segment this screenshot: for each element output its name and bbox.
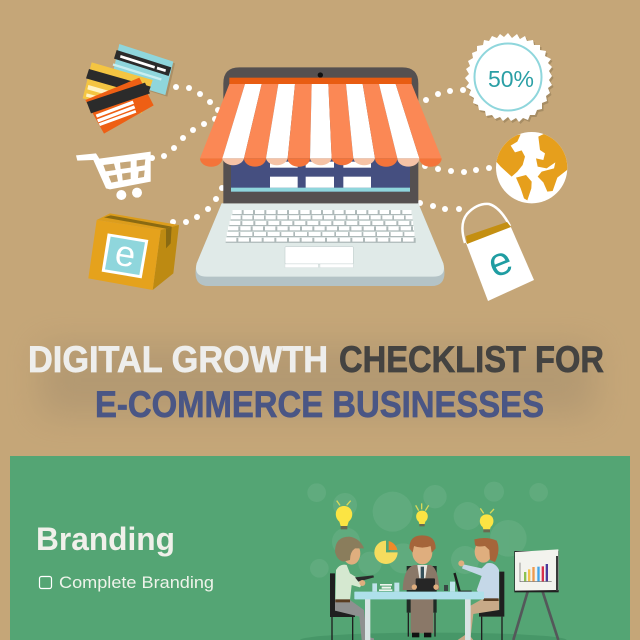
icon: globe xyxy=(493,132,570,203)
checklist item: Complete Branding xyxy=(59,573,214,592)
keyboard xyxy=(226,212,416,240)
title: E-COMMERCE BUSINESSES xyxy=(95,384,544,425)
icon: parcel box: e xyxy=(112,232,139,275)
title: CHECKLIST FOR xyxy=(339,339,604,380)
title: DIGITAL GROWTH xyxy=(28,339,328,380)
touchpad xyxy=(285,247,353,264)
title glow xyxy=(40,345,595,415)
bag letter: e xyxy=(481,237,519,287)
person left xyxy=(330,537,374,640)
icon: shopping bag xyxy=(462,204,534,301)
pie chart icon xyxy=(374,541,398,564)
screen bezel xyxy=(223,67,418,203)
awning xyxy=(200,78,442,167)
dotted connector lines xyxy=(149,84,492,225)
illustration: team meeting xyxy=(300,482,567,640)
bulb right xyxy=(480,508,494,532)
discount label: 50% xyxy=(488,66,534,92)
icon: shopping cart xyxy=(76,152,151,200)
laptop base xyxy=(196,203,444,286)
floor shadow xyxy=(300,633,567,640)
laptop xyxy=(196,67,444,286)
icon: credit cards xyxy=(83,44,175,134)
bulb middle xyxy=(416,503,429,526)
panel: branding xyxy=(10,456,630,640)
title xyxy=(28,339,604,425)
table xyxy=(354,592,484,640)
icon: parcel box xyxy=(88,213,179,290)
presentation easel xyxy=(513,549,559,640)
background bubbles xyxy=(307,482,548,578)
screen content xyxy=(231,160,410,192)
heading: branding: Branding xyxy=(36,521,175,557)
person middle xyxy=(403,535,439,637)
table items xyxy=(372,582,455,592)
person right xyxy=(453,538,504,640)
icon: 50% discount badge xyxy=(465,33,554,124)
checkbox xyxy=(40,576,52,588)
bulb left xyxy=(336,501,352,529)
